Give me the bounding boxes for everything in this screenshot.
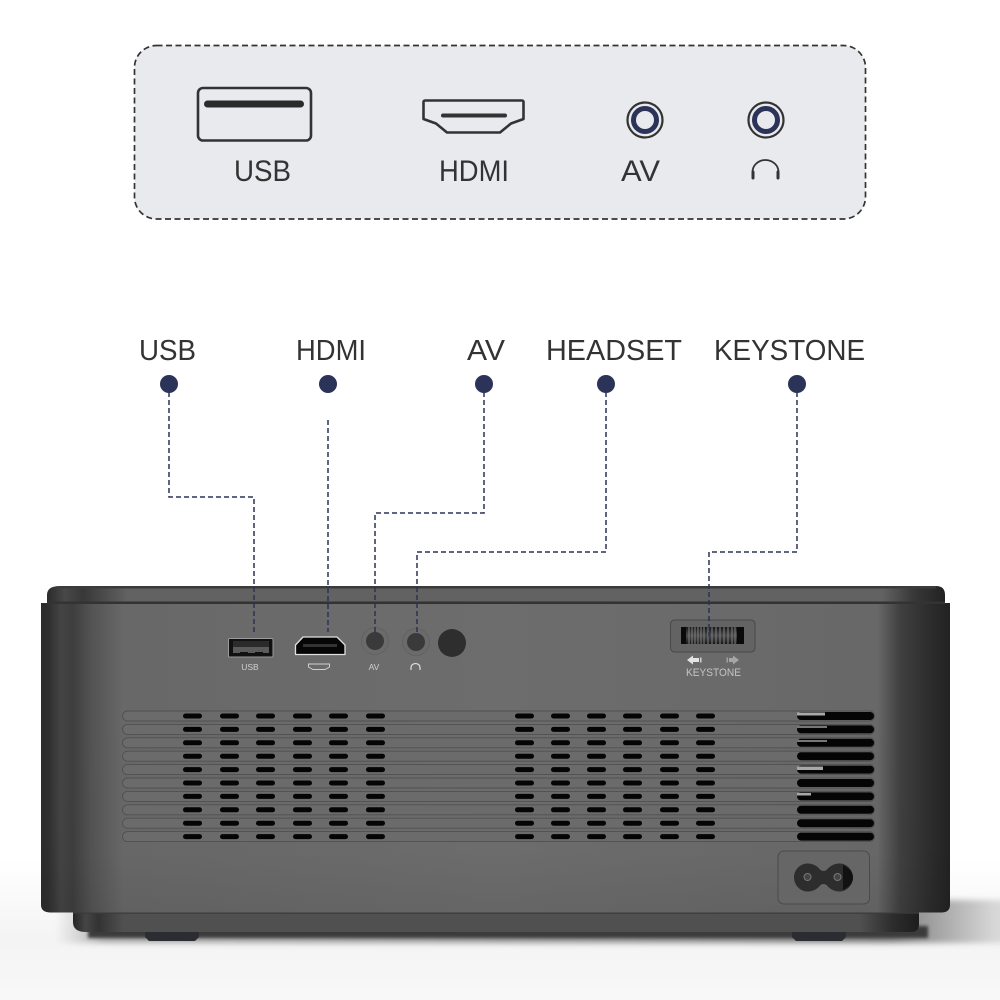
dot: headset	[597, 375, 615, 393]
connector: AV	[375, 384, 484, 632]
icon: AV jack	[628, 102, 662, 138]
label: HEADSET: HEADSET	[546, 335, 682, 367]
dot: AV	[475, 375, 493, 393]
icon: HDMI port	[424, 100, 524, 132]
dot: USB	[160, 375, 178, 393]
label: USB: USB	[234, 155, 291, 188]
dot: HDMI	[319, 375, 337, 393]
ventilation grille	[122, 711, 874, 842]
connector: headset	[417, 384, 606, 632]
keystone control	[670, 620, 755, 679]
connector: HDMI	[327, 420, 329, 632]
icon: headphone jack	[748, 102, 784, 138]
port label: AV: AV	[369, 662, 380, 672]
IR sensor window	[438, 629, 466, 657]
port label: headphone symbol	[411, 664, 420, 670]
ground shadow	[55, 900, 1000, 943]
label: AV: AV	[467, 335, 506, 367]
port: USB	[228, 638, 273, 657]
label: KEYSTONE: KEYSTONE	[714, 335, 865, 367]
port: headset	[402, 628, 430, 656]
port: HDMI	[296, 637, 345, 654]
main casing	[41, 603, 950, 912]
label: USB: USB	[139, 335, 196, 367]
socket pins	[804, 874, 841, 880]
projector body	[41, 586, 950, 932]
keystone label: KEYSTONE	[686, 667, 741, 679]
keystone arrows	[687, 656, 739, 664]
feet	[145, 930, 846, 941]
power socket	[778, 851, 870, 904]
base plinth	[73, 908, 919, 932]
socket outline	[794, 864, 853, 892]
callout dots	[160, 375, 806, 393]
connector: USB	[169, 384, 254, 632]
label: HDMI: HDMI	[296, 335, 366, 367]
icon: headphones	[752, 160, 778, 178]
port label: USB: USB	[241, 662, 259, 672]
top lid	[47, 586, 945, 603]
label: HDMI: HDMI	[439, 155, 509, 188]
callout connector lines	[169, 384, 797, 640]
connector: keystone	[709, 384, 797, 640]
dot: keystone	[788, 375, 806, 393]
label: AV: AV	[621, 155, 660, 188]
port label: HDMI symbol	[308, 664, 330, 670]
panel background	[134, 46, 866, 219]
keystone wheel	[681, 627, 744, 644]
callout labels	[139, 335, 865, 367]
icon: USB port	[198, 88, 311, 140]
port: AV	[362, 628, 388, 654]
panel: port legend	[134, 46, 866, 219]
